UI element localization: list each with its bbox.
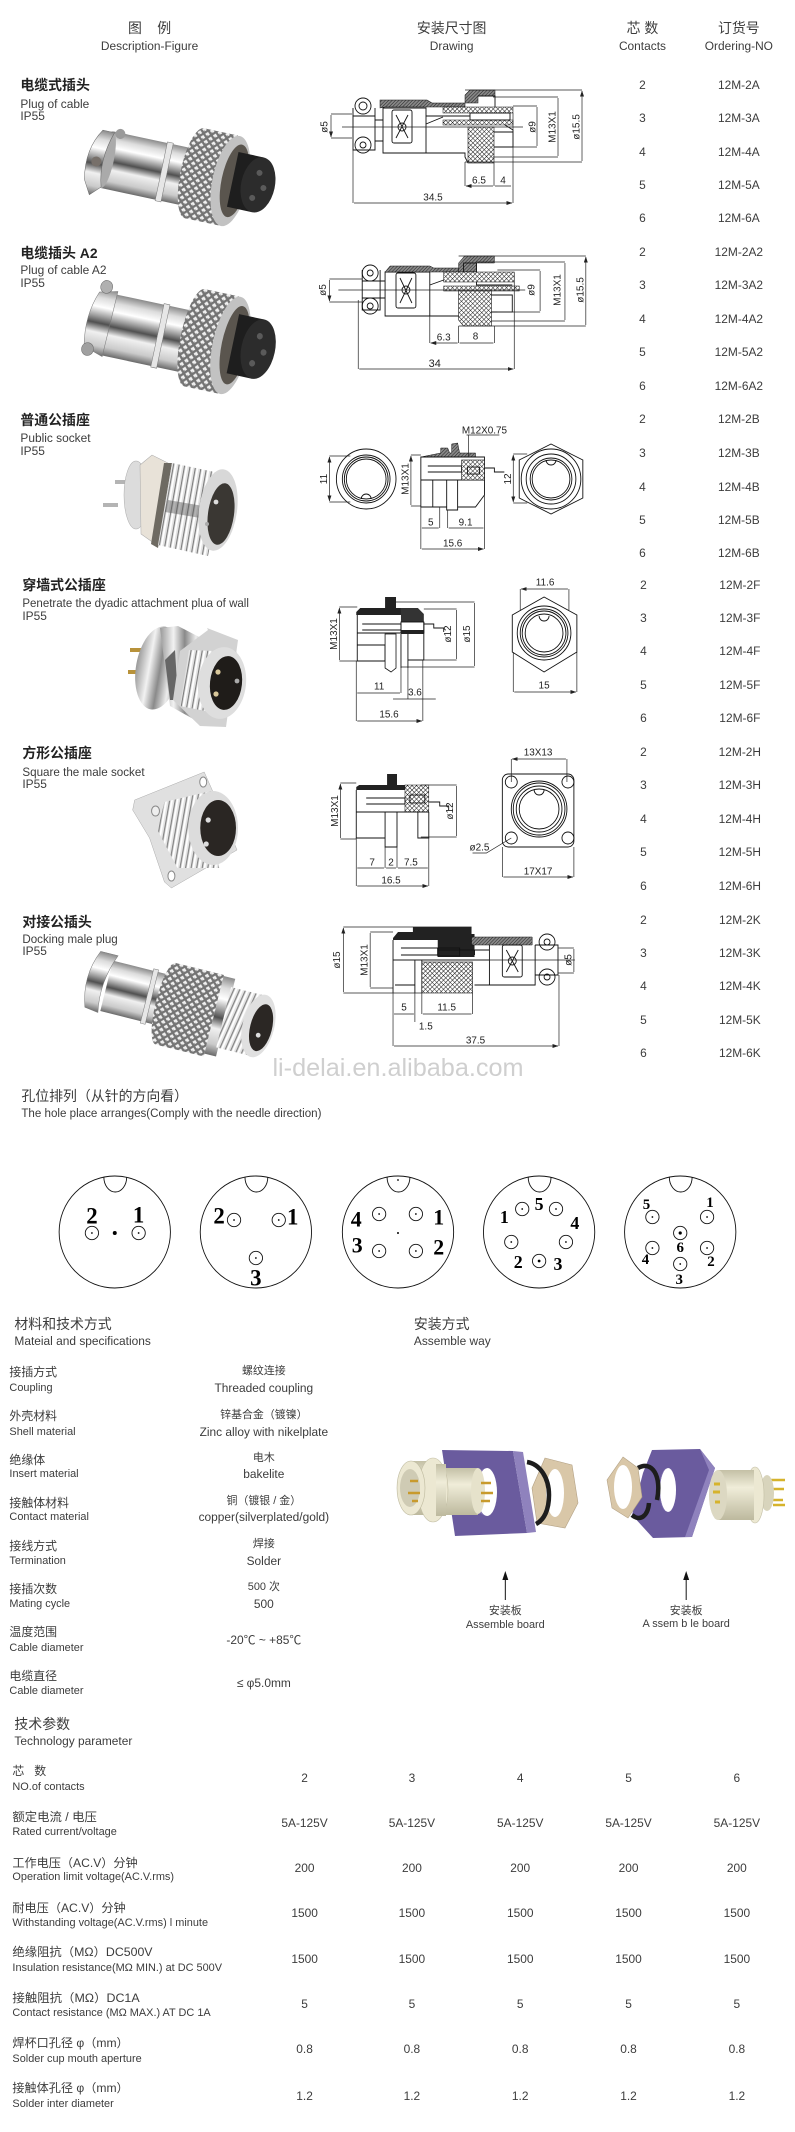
- ordering list: docking male plug: 12M-2K: [719, 913, 761, 927]
- drawing: docking male plug: ø15: [332, 951, 343, 969]
- heading: technology parameter: Technology parameter: [14, 1734, 132, 1748]
- ordering list: docking male plug: 12M-3K: [719, 946, 761, 960]
- table header: 安装尺寸图: [417, 20, 486, 36]
- table: technology parameter: 200: [619, 1861, 639, 1875]
- heading: technology parameter: [14, 1716, 132, 1748]
- table: technology parameter: [12, 1763, 760, 2110]
- table header: Contacts: [619, 39, 666, 53]
- drawing: square male socket: M13X1: [330, 795, 341, 827]
- table: technology parameter: Solder inter diameter: [12, 2098, 114, 2110]
- table: materials and specifications: 螺纹连接: [242, 1363, 286, 1377]
- heading: materials and specifications: 材料和技术方式: [14, 1316, 112, 1332]
- heading: materials and specifications: [14, 1316, 151, 1348]
- table: technology parameter: 1500: [724, 1906, 750, 1920]
- ordering list: plug of cable: 12M-3A: [718, 111, 760, 125]
- ordering list: square male socket: 12M-4H: [719, 812, 761, 826]
- table: materials and specifications: Termination: [9, 1555, 66, 1567]
- product title: plug of cable: 电缆式插头: [20, 77, 90, 93]
- ordering list: plug of cable A2: 12M-2A2: [715, 245, 763, 259]
- table: technology parameter: Insulation resistance(MΩ MIN.) at DC 500V: [12, 1962, 223, 1974]
- ordering list: square male socket: 12M-3H: [719, 778, 761, 792]
- ordering list: docking male plug: 12M-5K: [719, 1013, 761, 1027]
- pin diagram: 3 contacts: 3: [250, 1265, 262, 1291]
- table: technology parameter: 5: [625, 1997, 632, 2011]
- table header: 图 例: [128, 20, 171, 36]
- pin diagram: 5 contacts: 3: [554, 1254, 562, 1274]
- pin diagram: 5 contacts: [483, 1176, 595, 1288]
- product title: square male socket: 方形公插座: [22, 745, 92, 761]
- product title: plug of cable A2: IP55: [20, 276, 45, 290]
- label: assemble board right: A ssem b le board: [642, 1618, 730, 1630]
- heading: assemble way: [414, 1316, 491, 1348]
- product title: public socket: 普通公插座: [20, 412, 90, 428]
- table: materials and specifications: 电缆直径: [9, 1669, 57, 1683]
- product title: public socket: [20, 412, 91, 458]
- label: assemble board right: [642, 1603, 730, 1630]
- drawing: cable plug: [320, 90, 583, 203]
- table: technology parameter: 1500: [399, 1906, 426, 1920]
- product title: penetrate the wall socket: [22, 577, 249, 623]
- drawing: docking male plug: 1.5: [419, 1021, 433, 1033]
- table: technology parameter: 1500: [291, 1952, 318, 1966]
- drawing: docking male plug: M13X1: [360, 944, 371, 976]
- ordering list: penetrate the wall socket: 12M-2F: [719, 578, 760, 592]
- ordering list: docking male plug: [640, 913, 761, 1060]
- table: technology parameter: 5: [625, 1771, 632, 1785]
- table: materials and specifications: 接触体材料: [9, 1495, 69, 1510]
- table: technology parameter: 5A-125V: [281, 1816, 328, 1830]
- table: materials and specifications: 500: [254, 1597, 274, 1611]
- ordering list: plug of cable A2: 3: [639, 278, 646, 292]
- table: technology parameter: 1.2: [512, 2089, 529, 2103]
- drawing: public socket: 12: [503, 473, 514, 485]
- table: technology parameter: 焊杯口孔径 φ（mm）: [12, 2035, 129, 2050]
- product title: plug of cable: [20, 77, 90, 123]
- table header: Ordering-NO: [705, 39, 773, 53]
- table: technology parameter: 200: [727, 1861, 747, 1875]
- drawing: public socket: 9.1: [459, 517, 473, 529]
- product title: penetrate the wall socket: 穿墙式公插座: [22, 577, 106, 593]
- pin diagram: 4 contacts: [342, 1176, 454, 1288]
- table: technology parameter: 2: [301, 1771, 308, 1785]
- heading: materials and specifications: Mateial and specifications: [14, 1334, 151, 1348]
- pin diagram: 2 contacts: 2: [86, 1203, 98, 1229]
- ordering list: docking male plug: 12M-4K: [719, 979, 761, 993]
- drawing: cable plug A2: ø15.5: [575, 277, 586, 303]
- drawing: square male socket: ø2.5: [470, 842, 490, 854]
- table: technology parameter: 5: [734, 1997, 741, 2011]
- table: technology parameter: 200: [510, 1861, 531, 1875]
- table: materials and specifications: 外壳材料: [9, 1409, 57, 1423]
- table: materials and specifications: 500 次: [248, 1579, 280, 1593]
- drawing: square male socket: 13X13: [524, 747, 553, 759]
- table: materials and specifications: 铜（镀银 / 金）: [227, 1493, 301, 1507]
- photo: penetrate the wall socket: [128, 623, 250, 727]
- table: materials and specifications: Insert material: [9, 1468, 79, 1480]
- pin diagram: 5 contacts: 4: [570, 1213, 579, 1233]
- table: materials and specifications: [9, 1363, 329, 1697]
- table: technology parameter: 5A-125V: [497, 1816, 543, 1830]
- table: technology parameter: 接触体孔径 φ（mm）: [12, 2080, 129, 2095]
- pin diagram: 6 contacts: 3: [676, 1272, 683, 1288]
- table: technology parameter: 额定电流 / 电压: [12, 1809, 97, 1824]
- table: materials and specifications: copper(silverplated/gold): [199, 1510, 329, 1524]
- table: materials and specifications: Coupling: [9, 1382, 53, 1394]
- ordering list: plug of cable: 2: [639, 78, 646, 92]
- table: materials and specifications: bakelite: [243, 1467, 285, 1481]
- drawing: public socket: 5: [428, 517, 434, 529]
- drawing: penetrate the wall socket: ø15: [462, 625, 473, 643]
- product title: public socket: Public socket: [20, 431, 91, 445]
- table: technology parameter: 1.2: [620, 2089, 637, 2103]
- ordering list: plug of cable A2: 12M-6A2: [715, 379, 763, 393]
- drawing: docking male plug: [332, 927, 575, 1047]
- drawing: docking male plug: 5: [401, 1002, 407, 1014]
- ordering list: docking male plug: 5: [640, 1013, 647, 1027]
- ordering list: plug of cable A2: 12M-5A2: [715, 345, 763, 359]
- ordering list: plug of cable A2: 12M-4A2: [715, 312, 763, 326]
- table header: Description-Figure: [101, 39, 199, 53]
- table: technology parameter: 5: [301, 1997, 308, 2011]
- table: materials and specifications: 温度范围: [9, 1624, 57, 1639]
- table: technology parameter: 1500: [399, 1952, 426, 1966]
- table: technology parameter: 1500: [507, 1906, 534, 1920]
- drawing: penetrate the wall socket: 15.6: [379, 709, 399, 721]
- pin diagram: 6 contacts: 5: [643, 1197, 650, 1213]
- table: materials and specifications: Cable diameter: [9, 1685, 84, 1697]
- table: technology parameter: 1500: [724, 1952, 750, 1966]
- ordering list: plug of cable: 3: [639, 111, 646, 125]
- product title: docking male plug: Docking male plug: [22, 932, 118, 946]
- photo: cable plug: [79, 106, 284, 235]
- table: materials and specifications: 接插方式: [9, 1364, 57, 1379]
- drawing: penetrate the wall socket: 11.6: [536, 577, 555, 589]
- drawing: docking male plug: 11.5: [437, 1002, 456, 1014]
- ordering list: plug of cable: 5: [639, 178, 646, 192]
- table: technology parameter: 0.8: [620, 2042, 637, 2056]
- pin diagram: 2 contacts: 1: [133, 1202, 144, 1228]
- table: technology parameter: 接触阻抗（MΩ）DC1A: [12, 1990, 140, 2005]
- photo: square male socket: [133, 772, 238, 888]
- pin diagram: 2 contacts: [59, 1176, 170, 1288]
- ordering list: square male socket: 5: [640, 845, 647, 859]
- watermark: li-delai.en.alibaba.com: [272, 1054, 524, 1082]
- arrow: assemble board left: [502, 1571, 508, 1600]
- drawing: cable plug: M13X1: [548, 111, 559, 143]
- table header: [101, 20, 773, 53]
- ordering list: public socket: 12M-6B: [718, 546, 760, 560]
- ordering list: square male socket: 3: [640, 778, 647, 792]
- drawing: cable plug: ø15.5: [572, 114, 583, 140]
- product title: plug of cable A2: 电缆插头 A2: [20, 245, 98, 261]
- drawing: square male socket: 2: [388, 857, 394, 869]
- ordering list: square male socket: 12M-5H: [719, 845, 761, 859]
- ordering list: penetrate the wall socket: 5: [640, 678, 647, 692]
- table: materials and specifications: Solder: [247, 1554, 281, 1568]
- table: technology parameter: 1.2: [729, 2089, 745, 2103]
- ordering list: public socket: 4: [639, 480, 646, 494]
- pin diagram: 5 contacts: 5: [535, 1194, 544, 1214]
- ordering list: square male socket: [640, 745, 761, 893]
- illustration: assembly rear view: [607, 1449, 785, 1538]
- drawing: public socket: [319, 425, 583, 550]
- heading: assemble way: Assemble way: [414, 1334, 491, 1348]
- table: technology parameter: 工作电压（AC.V）分钟: [12, 1855, 138, 1870]
- product title: penetrate the wall socket: Penetrate the dyadic attachment plua of wall: [22, 596, 249, 610]
- ordering list: plug of cable A2: 4: [639, 312, 646, 326]
- ordering list: penetrate the wall socket: 4: [640, 644, 647, 658]
- drawing: penetrate the wall socket: M13X1: [329, 618, 340, 650]
- drawing: cable plug A2: 34: [429, 358, 441, 370]
- drawing: docking male plug: ø5: [563, 954, 574, 966]
- photo: cable plug A2: [78, 266, 284, 403]
- drawing: public socket: M13X1: [400, 463, 411, 495]
- illustration: assembly front view: [397, 1450, 578, 1536]
- table: technology parameter: Rated current/voltage: [12, 1826, 117, 1838]
- table: technology parameter: 5A-125V: [389, 1816, 435, 1830]
- pin diagram: 3 contacts: [200, 1176, 312, 1291]
- pin diagram: 4 contacts: 1: [433, 1204, 444, 1230]
- ordering list: docking male plug: 4: [640, 979, 647, 993]
- table: materials and specifications: 电木: [253, 1451, 275, 1464]
- ordering list: plug of cable A2: 5: [639, 345, 646, 359]
- pin diagram: 4 contacts: 2: [433, 1234, 444, 1260]
- label: assemble board left: [466, 1603, 545, 1631]
- drawing: penetrate the wall socket: ø12: [443, 625, 454, 643]
- ordering list: plug of cable A2: [639, 245, 763, 393]
- drawing: penetrate the wall socket: 11: [374, 681, 385, 693]
- ordering list: penetrate the wall socket: [640, 578, 760, 725]
- drawing: cable plug A2: 8: [473, 331, 479, 343]
- table: technology parameter: 4: [517, 1771, 524, 1785]
- ordering list: penetrate the wall socket: 3: [640, 611, 647, 625]
- pin diagram: 3 contacts: 2: [213, 1203, 225, 1229]
- ordering list: plug of cable: 12M-6A: [718, 211, 760, 225]
- pin diagram: 3 contacts: 1: [287, 1204, 298, 1230]
- heading: hole place arranges: The hole place arranges(Comply with the needle direction): [21, 1106, 321, 1120]
- drawing: cable plug: ø9: [528, 121, 539, 133]
- product title: public socket: IP55: [20, 444, 45, 458]
- table: technology parameter: 5: [409, 1997, 416, 2011]
- ordering list: penetrate the wall socket: 2: [640, 578, 647, 592]
- heading: technology parameter: 技术参数: [14, 1716, 70, 1732]
- ordering list: public socket: 6: [639, 546, 646, 560]
- drawing: cable plug A2: 6.3: [437, 332, 451, 344]
- photo: public socket: [103, 455, 243, 556]
- drawing: square male socket: 16.5: [381, 875, 401, 887]
- ordering list: plug of cable: 12M-4A: [718, 145, 760, 159]
- ordering list: square male socket: 12M-2H: [719, 745, 761, 759]
- drawing: docking male plug: 37.5: [466, 1035, 486, 1047]
- table: materials and specifications: -20℃ ~ +85℃: [226, 1633, 301, 1647]
- table: technology parameter: 1.2: [296, 2089, 313, 2103]
- table: technology parameter: 5A-125V: [605, 1816, 652, 1830]
- ordering list: plug of cable A2: 12M-3A2: [715, 278, 763, 292]
- table: technology parameter: 芯 数: [12, 1763, 46, 1778]
- product title: penetrate the wall socket: IP55: [22, 609, 47, 623]
- table: technology parameter: 0.8: [296, 2042, 313, 2056]
- product title: plug of cable A2: [20, 245, 107, 290]
- table header: 芯 数: [627, 20, 658, 36]
- ordering list: public socket: 12M-5B: [718, 513, 760, 527]
- ordering list: penetrate the wall socket: 12M-3F: [719, 611, 760, 625]
- ordering list: plug of cable: 12M-2A: [718, 78, 760, 92]
- table: technology parameter: Solder cup mouth aperture: [12, 2053, 142, 2065]
- pin diagram: 5 contacts: 2: [514, 1252, 523, 1272]
- table: technology parameter: Contact resistance (MΩ MAX.) AT DC 1A: [12, 2007, 211, 2019]
- drawing: penetrate the wall socket: [329, 577, 577, 721]
- drawing: square male socket: ø12: [445, 802, 456, 820]
- ordering list: public socket: 12M-2B: [718, 412, 760, 426]
- table: materials and specifications: Threaded coupling: [214, 1381, 313, 1395]
- table: technology parameter: 1.2: [404, 2089, 421, 2103]
- table: technology parameter: NO.of contacts: [12, 1781, 85, 1793]
- ordering list: square male socket: 12M-6H: [719, 879, 761, 893]
- label: assemble board left: 安装板: [489, 1603, 522, 1617]
- ordering list: public socket: 2: [639, 412, 646, 426]
- ordering list: square male socket: 2: [640, 745, 647, 759]
- ordering list: public socket: 12M-4B: [718, 480, 760, 494]
- ordering list: plug of cable: 4: [639, 145, 646, 159]
- drawing: public socket: 15.6: [443, 538, 463, 550]
- drawing: square male socket: 7.5: [404, 857, 418, 869]
- table: technology parameter: 0.8: [729, 2042, 745, 2056]
- table: materials and specifications: 锌基合金（镀镍）: [220, 1407, 308, 1421]
- drawing: cable plug A2: M13X1: [553, 274, 563, 306]
- table: materials and specifications: Zinc alloy with nikelplate: [200, 1425, 328, 1439]
- table: technology parameter: Operation limit voltage(AC.V.rms): [12, 1871, 174, 1883]
- table: technology parameter: 耐电压（AC.V）分钟: [12, 1900, 126, 1915]
- product title: square male socket: Square the male socket: [22, 765, 145, 779]
- ordering list: penetrate the wall socket: 12M-5F: [719, 678, 760, 692]
- product title: plug of cable A2: Plug of cable A2: [20, 263, 107, 277]
- ordering list: plug of cable: 12M-5A: [718, 178, 760, 192]
- product title: square male socket: IP55: [22, 777, 47, 791]
- ordering list: square male socket: 4: [640, 812, 647, 826]
- table: materials and specifications: 接插次数: [9, 1581, 57, 1596]
- photo: docking male plug: [76, 943, 284, 1072]
- ordering list: penetrate the wall socket: 6: [640, 711, 647, 725]
- pin diagram: 6 contacts: [625, 1176, 736, 1288]
- table: technology parameter: Withstanding voltage(AC.V.rms) l minute: [12, 1917, 208, 1929]
- ordering list: docking male plug: 3: [640, 946, 647, 960]
- drawing: cable plug: 34.5: [423, 193, 443, 203]
- drawing: cable plug: 6.5: [472, 176, 486, 186]
- drawing: public socket: 11: [319, 473, 330, 484]
- ordering list: public socket: [639, 412, 760, 560]
- drawing: cable plug: ø5: [320, 121, 331, 133]
- ordering list: plug of cable: 6: [639, 211, 646, 225]
- pin diagram: 6 contacts: 6: [676, 1240, 684, 1256]
- table: technology parameter: 1500: [507, 1952, 534, 1966]
- table: materials and specifications: 焊接: [253, 1536, 275, 1550]
- product title: docking male plug: 对接公插头: [22, 914, 92, 930]
- label: assemble board left: Assemble board: [466, 1619, 545, 1631]
- product title: docking male plug: [22, 914, 118, 958]
- table: technology parameter: 5: [517, 1997, 524, 2011]
- drawing: cable plug A2: ø9: [527, 284, 538, 296]
- table: technology parameter: 绝缘阻抗（MΩ）DC500V: [12, 1944, 153, 1959]
- table header: Drawing: [430, 39, 474, 53]
- table: technology parameter: 3: [409, 1771, 416, 1785]
- drawing: public socket: M12X0.75: [462, 425, 508, 437]
- ordering list: plug of cable A2: 2: [639, 245, 646, 259]
- pin diagram: 6 contacts: 2: [707, 1254, 715, 1270]
- table: technology parameter: 6: [734, 1771, 741, 1785]
- product title: square male socket: [22, 745, 145, 791]
- table: technology parameter: 200: [295, 1861, 315, 1875]
- ordering list: square male socket: 6: [640, 879, 647, 893]
- table: materials and specifications: 接线方式: [9, 1538, 57, 1553]
- pin diagram: 4 contacts: 3: [352, 1232, 363, 1258]
- drawing: square male socket: 17X17: [524, 866, 553, 878]
- ordering list: docking male plug: 2: [640, 913, 647, 927]
- drawing: cable plug: 4: [500, 176, 506, 186]
- table: technology parameter: 0.8: [404, 2042, 421, 2056]
- table: technology parameter: 1500: [615, 1952, 642, 1966]
- product title: plug of cable: Plug of cable: [20, 97, 90, 111]
- table: materials and specifications: Cable diameter: [9, 1642, 84, 1654]
- ordering list: plug of cable: [639, 78, 760, 225]
- drawing: cable plug A2: [318, 256, 586, 370]
- drawing: penetrate the wall socket: 3.6: [408, 687, 422, 699]
- table: technology parameter: 0.8: [512, 2042, 529, 2056]
- table: materials and specifications: Contact material: [9, 1511, 89, 1523]
- pin diagram: 5 contacts: 1: [500, 1207, 509, 1227]
- table: technology parameter: 200: [402, 1861, 422, 1875]
- table header: 订货号: [718, 20, 760, 36]
- drawing: square male socket: 7: [369, 857, 375, 869]
- heading: hole place arranges: [21, 1088, 321, 1120]
- drawing: square male socket: [330, 747, 574, 887]
- table: materials and specifications: Mating cycle: [9, 1598, 70, 1610]
- ordering list: public socket: 12M-3B: [718, 446, 760, 460]
- product title: plug of cable: IP55: [20, 109, 45, 123]
- pin diagram: 6 contacts: 1: [706, 1195, 714, 1211]
- ordering list: penetrate the wall socket: 12M-6F: [719, 711, 760, 725]
- drawing: cable plug A2: ø5: [318, 284, 329, 296]
- label: assemble board right: 安装板: [670, 1603, 703, 1617]
- ordering list: public socket: 5: [639, 513, 646, 527]
- table: technology parameter: 1500: [291, 1906, 318, 1920]
- table: materials and specifications: 绝缘体: [9, 1452, 45, 1467]
- ordering list: plug of cable A2: 6: [639, 379, 646, 393]
- pin diagram: 4 contacts: 4: [351, 1206, 362, 1232]
- ordering list: docking male plug: 12M-6K: [719, 1046, 761, 1060]
- ordering list: public socket: 3: [639, 446, 646, 460]
- pin diagram: 6 contacts: 4: [642, 1252, 650, 1268]
- product title: docking male plug: IP55: [22, 944, 47, 958]
- table: technology parameter: 5A-125V: [714, 1816, 760, 1830]
- drawing: penetrate the wall socket: 15: [539, 680, 550, 692]
- table: materials and specifications: Shell material: [9, 1426, 76, 1438]
- heading: assemble way: 安装方式: [414, 1316, 470, 1332]
- table: materials and specifications: ≤ φ5.0mm: [237, 1676, 291, 1690]
- heading: hole place arranges: 孔位排列（从针的方向看）: [21, 1088, 188, 1104]
- arrow: assemble board right: [683, 1571, 689, 1600]
- table: technology parameter: 1500: [615, 1906, 642, 1920]
- ordering list: docking male plug: 6: [640, 1046, 647, 1060]
- ordering list: penetrate the wall socket: 12M-4F: [719, 644, 760, 658]
